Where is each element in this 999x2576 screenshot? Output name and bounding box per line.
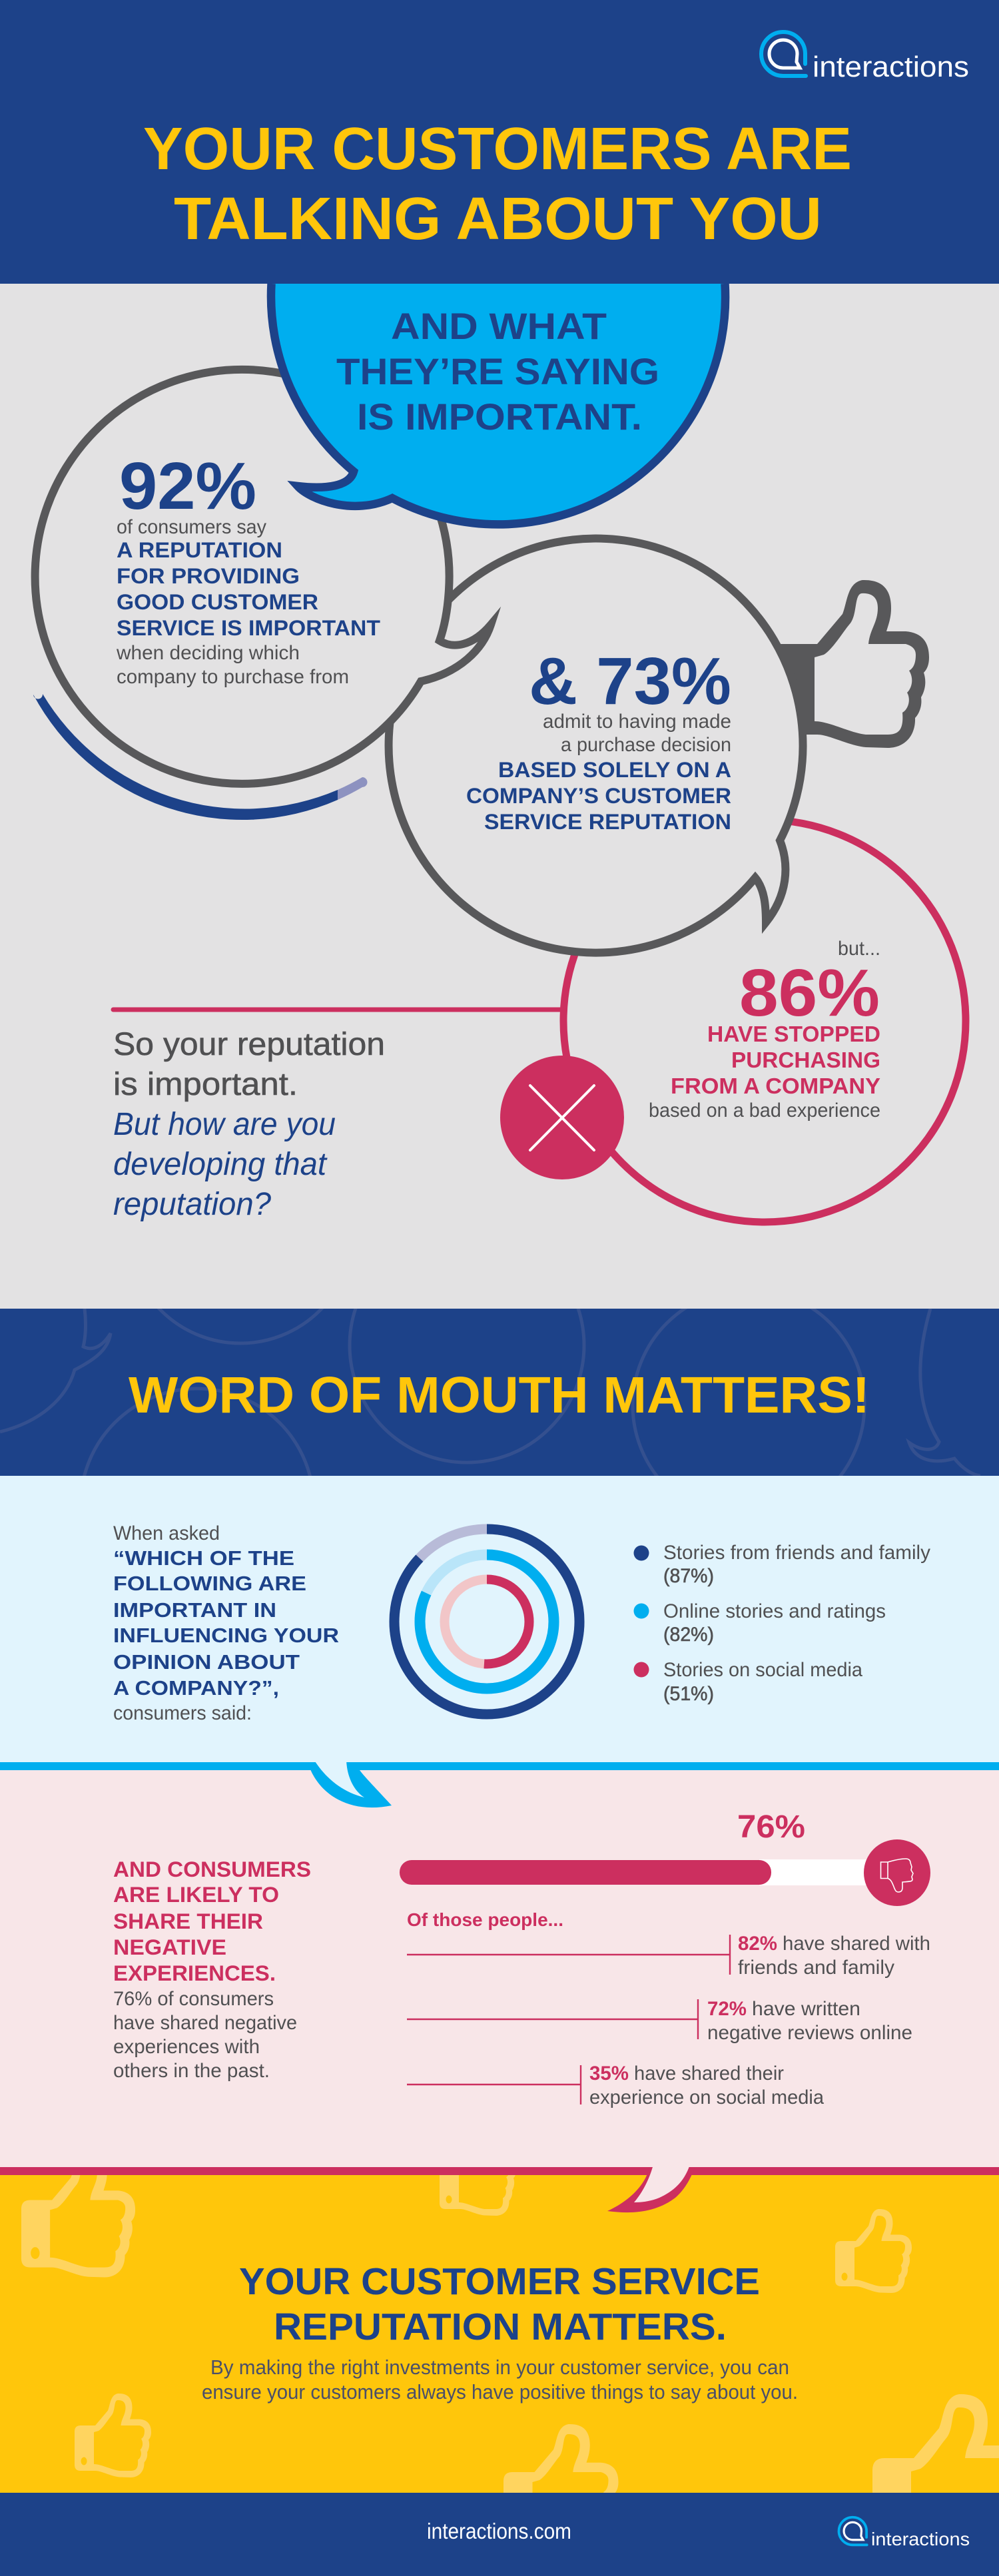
logo: footer interactions	[838, 2517, 970, 2549]
chart: concentric donut rings	[394, 1529, 579, 1714]
text: consumers likely to share negative experiences: NEGATIVE	[113, 1935, 226, 1959]
panel: word of mouth survey	[0, 1476, 999, 1807]
text: survey question: FOLLOWING ARE	[113, 1572, 306, 1595]
stat: 35% social media: experience on social media	[589, 2087, 824, 2108]
icon: thumbs up attached to bubble	[766, 580, 929, 748]
legend: (82%)	[663, 1624, 714, 1646]
title	[143, 116, 852, 252]
legend	[634, 1542, 930, 1705]
bubble heading	[336, 305, 659, 438]
stat: 72% negative reviews	[407, 1998, 912, 2044]
text: closing message: By making the right investments in your customer service, you can	[210, 2356, 789, 2379]
text: 86% stat: HAVE STOPPED	[707, 1022, 880, 1046]
text: survey question: When asked	[113, 1522, 220, 1544]
stat: 82% friends and family: have shared with	[783, 1933, 930, 1955]
text: 92% stat: company to purchase from	[117, 666, 349, 688]
text: 92% stat: A REPUTATION	[117, 538, 282, 562]
text: how are you developing reputation: But how are you	[113, 1107, 336, 1142]
text: 73% stat: a purchase decision	[561, 734, 731, 756]
heading: your customer service reputation matters: REPUTATION MATTERS.	[274, 2306, 727, 2348]
legend: Online stories and ratings	[663, 1600, 886, 1622]
text: 92% stat: 92%	[119, 449, 256, 523]
heading: your customer service reputation matters: YOUR CUSTOMER SERVICE	[239, 2260, 760, 2303]
text: of those people: Of those people...	[407, 1909, 563, 1930]
text: 92% stat: of consumers say	[117, 516, 266, 538]
decorative light thumbs	[21, 2132, 999, 2562]
decorative blue swoosh arc	[33, 694, 368, 820]
text: 92% stat: FOR PROVIDING	[117, 564, 300, 588]
heading: your customer service reputation matters	[239, 2260, 760, 2348]
bubble heading: IS IMPORTANT.	[357, 396, 642, 438]
text: survey question	[113, 1522, 339, 1724]
text: website: interactions.com	[427, 2519, 571, 2543]
title: TALKING ABOUT YOU	[174, 186, 822, 252]
text: 92% stat: GOOD CUSTOMER	[117, 590, 318, 614]
text: 92% stat: SERVICE IS IMPORTANT	[117, 616, 380, 640]
text: 86% stat: 86%	[739, 956, 880, 1030]
bar chart: 76%	[400, 1809, 930, 1906]
panel: reputation stats background	[0, 284, 999, 1309]
stat: 35% social media: 35%	[589, 2063, 629, 2085]
panel: customer service reputation matters	[0, 2175, 999, 2493]
text: consumers likely to share negative experiences: experiences with	[113, 2036, 260, 2058]
text: survey question: consumers said:	[113, 1702, 252, 1724]
text: consumers likely to share negative experiences: 76% of consumers	[113, 1988, 274, 2010]
text: how are you developing reputation: developing that	[113, 1147, 328, 1182]
panel: negative experiences	[0, 1770, 999, 2212]
bubble heading: AND WHAT	[391, 305, 607, 347]
red band with speech tail	[0, 2164, 999, 2212]
text: 73% stat: COMPANY’S CUSTOMER	[466, 784, 731, 808]
text: consumers likely to share negative experiences: EXPERIENCES.	[113, 1961, 276, 1985]
text: 86% stat	[649, 938, 880, 1122]
stat: 35% social media	[407, 2063, 824, 2108]
panel: footer	[0, 2493, 999, 2576]
text: closing message: ensure your customers always have positive things to say about you.	[202, 2380, 798, 2404]
stat: 72% negative reviews: 72%	[707, 1998, 747, 2020]
stat: 82% friends and family: friends and family	[738, 1957, 894, 1979]
legend: Stories on social media	[663, 1659, 862, 1681]
text: closing message	[202, 2356, 798, 2404]
text: 86% stat: FROM A COMPANY	[671, 1074, 880, 1098]
legend: Stories from friends and family	[663, 1542, 930, 1564]
bar chart: 76%: 76%	[737, 1809, 805, 1845]
heading: word of mouth matters: WORD OF MOUTH MATTERS!	[129, 1367, 870, 1424]
text: 73% stat: SERVICE REPUTATION	[484, 810, 731, 834]
text: consumers likely to share negative experiences: have shared negative	[113, 2012, 297, 2034]
stat: 82% friends and family	[407, 1933, 930, 1979]
text: survey question: INFLUENCING YOUR	[113, 1624, 339, 1647]
text: how are you developing reputation: is important.	[113, 1067, 298, 1102]
text: 73% stat: admit to having made	[543, 711, 731, 733]
legend: (87%)	[663, 1565, 714, 1587]
bubble heading: THEY’RE SAYING	[336, 350, 659, 392]
text: how are you developing reputation: reputation?	[113, 1187, 271, 1222]
text: 73% stat: BASED SOLELY ON A	[498, 758, 731, 782]
text: survey question: A COMPANY?”,	[113, 1676, 279, 1700]
bubble: 73% gray outline	[389, 539, 803, 953]
text: how are you developing reputation	[113, 1027, 385, 1222]
stat: 72% negative reviews: have written	[752, 1998, 860, 2020]
stat: 82% friends and family: 82%	[738, 1933, 777, 1955]
bubble: 92% gray outline	[35, 370, 491, 784]
text: consumers likely to share negative experiences: SHARE THEIR	[113, 1909, 263, 1933]
text: consumers likely to share negative experiences	[113, 1857, 311, 2082]
text: survey question: “WHICH OF THE	[113, 1546, 294, 1570]
text: how are you developing reputation: So your reputation	[113, 1027, 385, 1062]
bubble: and what they're saying	[271, 284, 725, 524]
divider line to red bubble	[113, 1007, 563, 1012]
panel: header	[0, 0, 999, 284]
decorative faint bubble outlines	[0, 1309, 980, 1476]
text: 86% stat: based on a bad experience	[649, 1100, 880, 1122]
stat: 35% social media: have shared their	[634, 2063, 784, 2085]
text: 73% stat: & 73%	[529, 644, 731, 719]
text: consumers likely to share negative experiences: AND CONSUMERS	[113, 1857, 311, 1881]
text: 92% stat	[116, 449, 380, 688]
text: consumers likely to share negative experiences: ARE LIKELY TO	[113, 1883, 279, 1907]
text: 86% stat: PURCHASING	[731, 1048, 880, 1072]
icon: red circle with X	[500, 1056, 624, 1179]
bubble: 86% red outline	[563, 820, 966, 1222]
text: survey question: IMPORTANT IN	[113, 1598, 276, 1622]
logo: footer interactions: interactions	[871, 2529, 970, 2549]
logo: interactions	[761, 32, 969, 83]
logo: interactions: interactions	[813, 51, 969, 83]
text: 86% stat: but...	[838, 938, 880, 960]
icon: thumbs down	[864, 1839, 930, 1906]
title: YOUR CUSTOMERS ARE	[143, 116, 852, 182]
blue band with speech tail	[0, 1758, 999, 1807]
legend: (51%)	[663, 1683, 714, 1705]
text: 92% stat: when deciding which	[116, 642, 300, 664]
stat: 72% negative reviews: negative reviews online	[707, 2022, 912, 2044]
text: consumers likely to share negative experiences: others in the past.	[113, 2060, 270, 2082]
text: 73% stat	[466, 644, 731, 834]
text: survey question: OPINION ABOUT	[113, 1650, 300, 1674]
panel: word of mouth banner	[0, 1309, 999, 1476]
